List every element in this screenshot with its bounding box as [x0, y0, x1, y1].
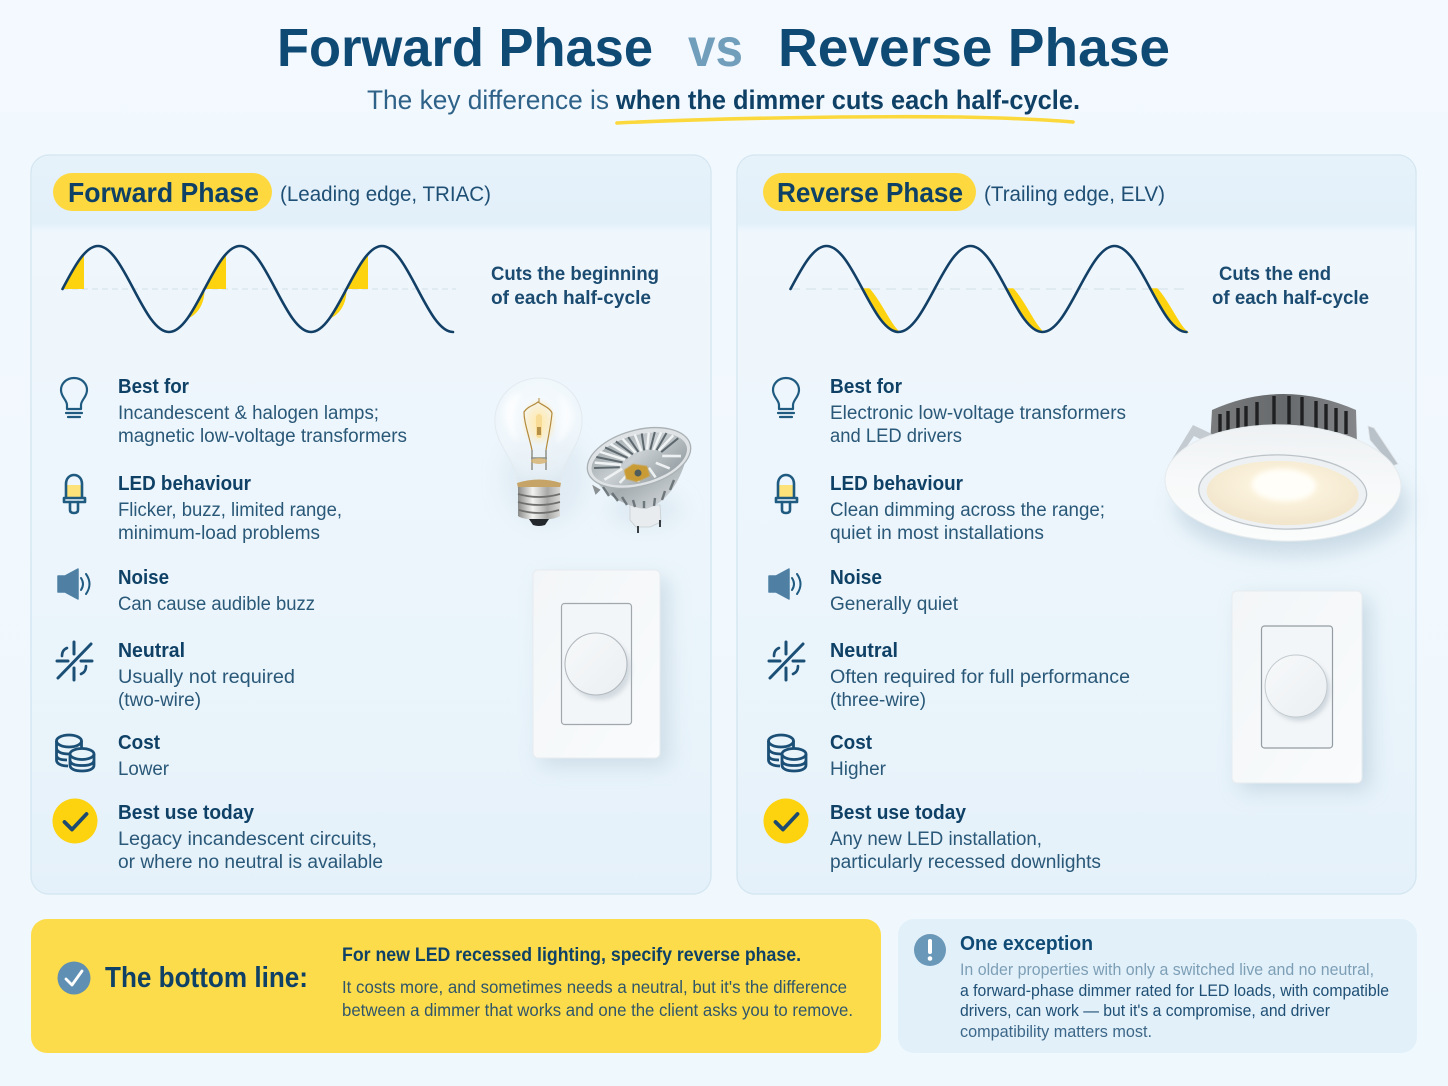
- callout: the bottom line: [31, 919, 881, 1053]
- heading: forward phase pill: Forward Phase: [68, 177, 259, 208]
- icon: coins: [768, 735, 806, 771]
- heading note: (Trailing edge, ELV): [984, 183, 1165, 206]
- exception text: compatibility matters most.: [960, 1023, 1152, 1041]
- text: best for: magnetic low-voltage transformers: [118, 426, 407, 447]
- text: neutral: (three-wire): [830, 690, 926, 711]
- chart: reverse phase waveform: [790, 246, 1188, 332]
- text: neutral: Usually not required: [118, 667, 295, 688]
- bottom line text: between a dimmer that works and one the client asks you to remove.: [342, 1000, 853, 1020]
- text: noise: Can cause audible buzz: [118, 594, 315, 615]
- illustration: recessed downlight: [1163, 394, 1408, 555]
- bottom line text: For new LED recessed lighting, specify reverse phase.: [342, 945, 801, 966]
- icon: neutral: [57, 642, 92, 680]
- text: neutral: Neutral: [118, 640, 185, 662]
- waveform caption: Cuts the beginning: [491, 263, 659, 285]
- text: noise: Noise: [830, 567, 882, 589]
- callout: one exception: [898, 919, 1417, 1053]
- icon: check badge: [764, 798, 808, 844]
- text: neutral: Often required for full performance: [830, 667, 1130, 688]
- icon: light bulb: [61, 378, 87, 417]
- text: best for: and LED drivers: [830, 426, 962, 447]
- icon: light bulb: [773, 378, 799, 417]
- text: best use today: Best use today: [830, 802, 967, 824]
- waveform caption: of each half-cycle: [491, 287, 651, 309]
- subtitle: [367, 85, 1080, 123]
- illustration: forward dimmer switch: [533, 570, 669, 766]
- illustration: reverse dimmer switch: [1232, 591, 1370, 790]
- text: best use today: [118, 802, 383, 873]
- waveform caption: [1212, 263, 1369, 309]
- text: noise: [830, 567, 959, 615]
- text: best for: Best for: [118, 376, 189, 398]
- text: neutral: Neutral: [830, 640, 898, 662]
- text: LED behaviour: LED behaviour: [830, 473, 963, 495]
- subtitle: when the dimmer cuts each half-cycle.: [615, 85, 1080, 115]
- exception text: In older properties with only a switched live and no neutral,: [960, 961, 1374, 979]
- text: cost: [830, 732, 887, 780]
- icon: LED: [776, 475, 797, 513]
- heading: reverse phase pill: Reverse Phase: [777, 177, 963, 208]
- exception text: drivers, can work — but it's a compromise, and driver: [960, 1002, 1330, 1020]
- panel: reverse phase: [737, 155, 1416, 894]
- bottom line heading: The bottom line:: [105, 962, 308, 994]
- subtitle: The key difference is: [367, 85, 609, 115]
- text: LED behaviour: minimum-load problems: [118, 523, 320, 544]
- text: noise: Generally quiet: [830, 594, 959, 615]
- text: cost: Cost: [830, 732, 872, 754]
- chart: forward phase waveform: [62, 246, 456, 332]
- title: vs: [688, 18, 743, 78]
- text: best use today: Best use today: [118, 802, 255, 824]
- icon: LED: [64, 475, 85, 513]
- text: best for: Electronic low-voltage transformers: [830, 403, 1126, 424]
- bottom line text: It costs more, and sometimes needs a neutral, but it's the difference: [342, 977, 847, 997]
- text: LED behaviour: [118, 473, 342, 544]
- title: [277, 18, 1170, 78]
- text: best use today: [830, 802, 1101, 873]
- text: LED behaviour: LED behaviour: [118, 473, 251, 495]
- icon: check circle: [58, 962, 90, 994]
- exception heading: One exception: [960, 933, 1093, 955]
- text: noise: [118, 567, 315, 615]
- heading note: (Leading edge, TRIAC): [280, 183, 491, 206]
- text: best for: [118, 376, 407, 447]
- text: best use today: or where no neutral is available: [118, 852, 383, 873]
- text: best use today: Any new LED installation,: [830, 829, 1042, 850]
- waveform caption: of each half-cycle: [1212, 287, 1369, 309]
- text: neutral: [118, 640, 295, 711]
- text: LED behaviour: Clean dimming across the range;: [830, 500, 1105, 521]
- text: cost: Cost: [118, 732, 160, 754]
- illustration: halogen reflector lamp: [581, 417, 697, 533]
- icon: speaker: [769, 569, 800, 599]
- waveform caption: Cuts the end: [1219, 263, 1331, 285]
- text: best for: Incandescent & halogen lamps;: [118, 403, 379, 424]
- waveform caption: [491, 263, 659, 309]
- text: best use today: particularly recessed downlights: [830, 852, 1101, 873]
- text: LED behaviour: [830, 473, 1105, 544]
- icon: coins: [56, 735, 94, 771]
- text: cost: Lower: [118, 759, 170, 780]
- illustration: incandescent bulb: [495, 378, 587, 526]
- panel: forward phase: [31, 155, 711, 894]
- icon: check badge: [52, 798, 98, 844]
- title: Reverse Phase: [778, 18, 1170, 78]
- icon: neutral: [769, 642, 804, 680]
- text: cost: [118, 732, 170, 780]
- text: best for: [830, 376, 1126, 447]
- icon: exclamation: [914, 934, 946, 966]
- text: LED behaviour: Flicker, buzz, limited range,: [118, 500, 342, 521]
- exception text: a forward-phase dimmer rated for LED loads, with compatible: [960, 982, 1389, 1000]
- text: neutral: [830, 640, 1130, 711]
- icon: speaker: [58, 569, 90, 599]
- title: Forward Phase: [277, 18, 653, 78]
- bottom line text: [342, 945, 853, 1020]
- text: cost: Higher: [830, 759, 887, 780]
- text: neutral: (two-wire): [118, 690, 201, 711]
- text: noise: Noise: [118, 567, 169, 589]
- text: LED behaviour: quiet in most installations: [830, 523, 1044, 544]
- exception text: [960, 961, 1389, 1041]
- text: best use today: Legacy incandescent circuits,: [118, 829, 377, 850]
- text: best for: Best for: [830, 376, 902, 398]
